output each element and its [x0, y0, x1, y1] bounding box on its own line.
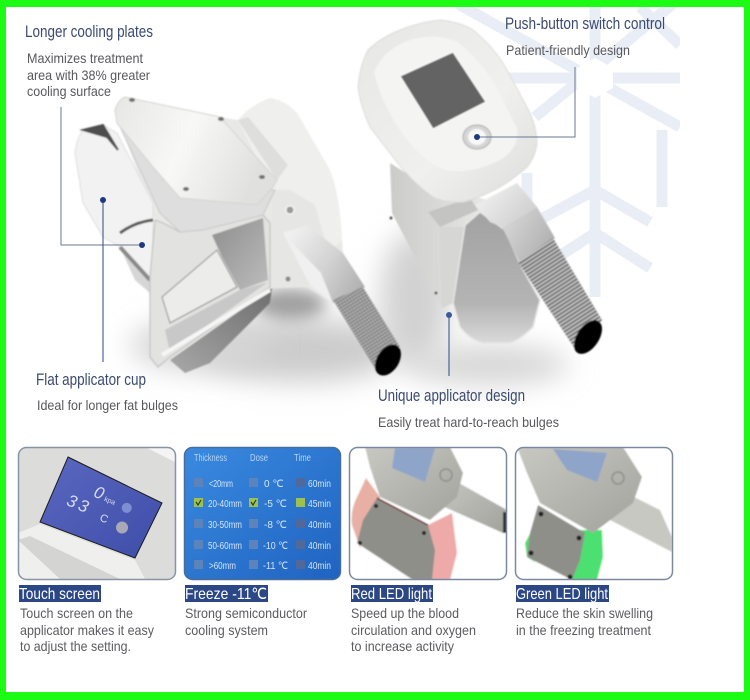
- shadows under the applicators: [130, 230, 570, 385]
- panel: freeze settings: <20mm: [209, 479, 233, 490]
- corrugated hose: [518, 238, 602, 352]
- arm: [610, 497, 672, 552]
- heading: push-button: Push-button switch control: [505, 14, 665, 33]
- head: [517, 447, 642, 533]
- hose collar: [283, 225, 343, 272]
- LCD screen: [40, 457, 162, 558]
- caption: green LED: [516, 585, 653, 638]
- callout line: push button: [474, 67, 575, 140]
- plate: [357, 498, 435, 580]
- heading: flat applicator cup: Flat applicator cup: [36, 370, 146, 389]
- caption: touch screen: applicator makes it easy: [20, 622, 154, 638]
- LCD readout: kpa: [103, 496, 116, 507]
- head: [365, 447, 463, 520]
- LCD readout: 0: [91, 482, 108, 504]
- text: push-button description: Patient-friendly design: [506, 42, 630, 58]
- bottom tray: [170, 288, 272, 373]
- heading: longer cooling plates: Longer cooling plates: [25, 22, 153, 41]
- LCD readout: 33: [64, 491, 94, 518]
- panel: freeze settings: 30-50mm: [208, 520, 242, 531]
- text: unique applicator description: Easily treat hard-to-reach bulges: [378, 414, 559, 430]
- callout line: flat applicator cup: [100, 197, 106, 362]
- heading: unique applicator: Unique applicator design: [378, 386, 525, 405]
- plate: [527, 505, 585, 580]
- left applicator: [75, 97, 406, 380]
- text: cooling plates description: cooling surface: [27, 83, 111, 99]
- panel: freeze settings: 20-40mm: [208, 499, 242, 510]
- LCD readout: C: [98, 512, 110, 526]
- hose collar: [475, 183, 537, 227]
- text: cooling plates description: area with 38% greater: [27, 67, 150, 83]
- background snowflake: [458, 0, 680, 297]
- LCD readout: [66, 487, 132, 534]
- panel: freeze settings: Dose: [250, 453, 268, 464]
- caption: green LED: in the freezing treatment: [516, 622, 651, 638]
- corrugated hose: [333, 287, 400, 373]
- caption: red LED: to increase activity: [351, 638, 454, 654]
- text: cooling plates description: Maximizes treatment: [27, 50, 143, 66]
- panel: green LED: [515, 447, 672, 580]
- lower block: [440, 227, 465, 308]
- caption: freeze: cooling system: [185, 622, 268, 638]
- panel: freeze settings: -8 ℃: [264, 520, 287, 531]
- caption: touch screen: Touch screen on the: [20, 605, 133, 621]
- panel: red LED: [349, 447, 507, 580]
- panel: freeze settings: -5 ℃: [264, 499, 287, 510]
- base silhouette: [115, 97, 343, 373]
- arm: [444, 484, 506, 534]
- caption: touch screen: to adjust the setting.: [20, 638, 131, 654]
- mounting block: [270, 190, 325, 287]
- body column: [390, 163, 490, 308]
- panel: freeze settings: 60min: [308, 479, 331, 490]
- panel: touch screen: [18, 447, 176, 580]
- caption: red LED: circulation and oxygen: [351, 622, 476, 638]
- rear housing: [238, 98, 342, 270]
- push button: [463, 125, 491, 149]
- caption: touch screen: Touch screen: [19, 586, 100, 603]
- caption: red LED: Speed up the blood: [351, 605, 459, 621]
- caption: red LED: Red LED light: [351, 586, 432, 603]
- panel: freeze settings: >60mm: [209, 561, 236, 572]
- caption: freeze: [185, 585, 307, 638]
- panel: freeze settings: 45min: [308, 499, 331, 510]
- clear cup back: [75, 125, 153, 293]
- panel: freeze settings: -11 ℃: [263, 561, 288, 572]
- panel: freeze settings: 0 ℃: [264, 479, 284, 490]
- caption: red LED: [351, 585, 476, 654]
- right applicator: [358, 20, 608, 359]
- panel: freeze settings: -10 ℃: [263, 541, 288, 552]
- panel: freeze settings: [184, 447, 341, 580]
- green glow: [525, 530, 535, 562]
- caption: touch screen: [19, 585, 154, 654]
- top cooling plate: [115, 97, 277, 205]
- caption: freeze: Freeze -11℃: [185, 586, 267, 603]
- clear cup front: [150, 215, 270, 367]
- caption: freeze: Strong semiconductor: [185, 605, 307, 621]
- screen: [400, 52, 486, 129]
- panel: freeze settings: 40min: [308, 561, 331, 572]
- panel: freeze settings: 40min: [308, 520, 331, 531]
- red glow: [352, 478, 380, 548]
- panel: freeze settings: 40min: [308, 541, 331, 552]
- panel: freeze settings: Thickness: [194, 453, 227, 464]
- head: [358, 20, 537, 202]
- panel: freeze settings: Time: [294, 453, 311, 464]
- text: flat cup description: Ideal for longer fat bulges: [37, 397, 178, 413]
- hose end: [370, 340, 406, 380]
- plate side wall: [117, 120, 275, 232]
- caption: green LED: Green LED light: [516, 586, 608, 603]
- callout line: unique applicator: [446, 312, 452, 376]
- clear cup: [453, 212, 540, 343]
- caption: green LED: Reduce the skin swelling: [516, 605, 653, 621]
- callout line: longer cooling plates: [61, 107, 145, 248]
- panel: freeze settings: 50-60mm: [208, 541, 242, 552]
- hose end: [568, 315, 608, 359]
